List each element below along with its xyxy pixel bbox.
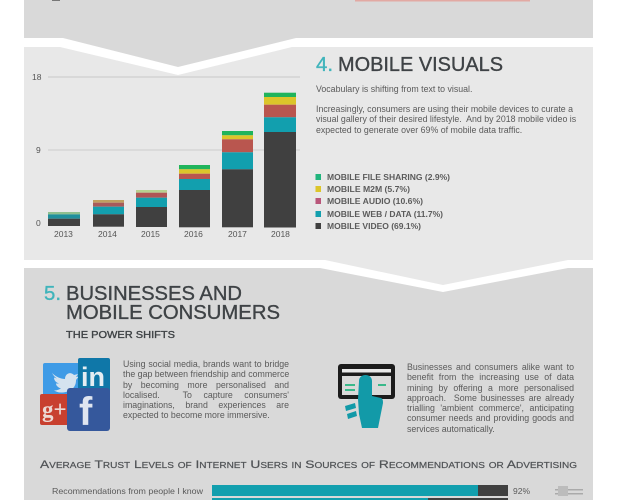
row: recommendations from people I know [52, 485, 583, 496]
heading: 5. businesses and mobile consumers [44, 283, 280, 341]
text block: section 4 body: expected to generate over 69% of mobile data traffic. [316, 125, 522, 135]
icon: twitter [43, 363, 80, 396]
bar 2015 [136, 190, 167, 227]
panel: previous section with chevron [24, 0, 593, 67]
bar 2016 [179, 165, 210, 227]
icon: hand swiping card [338, 364, 395, 428]
icon: google plus: g+ [42, 397, 67, 422]
chart axis labels: 2016 [184, 229, 203, 239]
text block: ambient commerce: consumer needs and providing goods and [407, 413, 574, 423]
icon: social media logos [40, 358, 110, 434]
heading: 5. businesses and mobile consumers: BUSINESSES AND [66, 283, 242, 305]
text block: ambient commerce: services automatically. [407, 424, 495, 434]
bar 2017 [222, 131, 253, 227]
chart axis labels: 2018 [271, 229, 290, 239]
panel: section 5 businesses background [24, 268, 593, 500]
text block: ambient commerce: Businesses and consumers alike want to [407, 362, 574, 372]
text block: section 4 intro: Vocabulary is shifting from text to visual. [316, 84, 472, 94]
bar chart: trust levels [52, 485, 583, 500]
heading: 5. businesses and mobile consumers: THE POWER SHIFTS [66, 330, 175, 341]
text block: ambient commerce: mining by offering a more personalised [407, 383, 574, 393]
chart axis labels: 2015 [141, 229, 160, 239]
text block: social media brands: Using social media, brands want to bridge [123, 359, 289, 369]
bar 2018 [264, 93, 296, 228]
text block: social media brands: by becoming more personalised and [123, 380, 289, 390]
chart axis labels: 2017 [228, 229, 247, 239]
text block: section 4 body: visual gallery of their desired lifestyle. And by 2018 mobile video is [316, 114, 576, 124]
text block: ambient commerce: approach. Some businesses are already [407, 393, 574, 403]
bar chart: mobile data traffic [32, 72, 300, 239]
row: recommendations from people I know: 92% [513, 486, 530, 496]
chart axis labels: 9 [36, 145, 41, 155]
text block: social media brands: localised. To capture consumers' [123, 390, 289, 400]
legend: mobile data types: MOBILE M2M (5.7%) [327, 185, 410, 194]
bar 2013 [48, 212, 80, 226]
legend: mobile data types: MOBILE VIDEO (69.1%) [327, 222, 421, 231]
heading: 4. mobile visuals: 4. [316, 54, 333, 76]
legend: mobile data types: MOBILE WEB / DATA (11.7%) [327, 210, 443, 219]
text block: social media brands: imaginations, brand experiences are [123, 400, 289, 410]
text block: ambient commerce: benefit from the increasing use of data [407, 372, 574, 382]
title: average trust levels: Average Trust Levels of Internet Users in Sources of Recommendations or Advertising [40, 459, 577, 471]
chart axis labels: 18 [32, 72, 42, 82]
heading: 5. businesses and mobile consumers: 5. [44, 283, 61, 305]
text block: social media brands: the gap between friendship and commerce [123, 369, 289, 379]
text block: social media brands [123, 359, 289, 420]
icon: facebook: f [79, 390, 93, 434]
legend: mobile data types [316, 173, 450, 231]
bar 2014 [93, 200, 124, 227]
chart axis labels: 2013 [54, 229, 73, 239]
heading: 4. mobile visuals: MOBILE VISUALS [338, 54, 503, 76]
icon: linkedin: in [81, 362, 105, 392]
legend: mobile data types: MOBILE AUDIO (10.6%) [327, 197, 423, 206]
text block: ambient commerce: trialling 'ambient commerce', anticipating [407, 403, 574, 413]
text block: social media brands: expected to become more immersive. [123, 410, 270, 420]
panel: section 4 mobile visuals background [24, 47, 593, 285]
text block: section 4 body [316, 104, 576, 135]
chart axis labels [32, 72, 290, 239]
chart axis labels: 0 [36, 218, 41, 228]
chart axis labels: 2014 [98, 229, 117, 239]
legend: mobile data types: MOBILE FILE SHARING (2.9%) [327, 173, 450, 182]
text block: ambient commerce [407, 362, 574, 434]
row: recommendations from people I know: Recommendations from people I know [52, 486, 204, 496]
heading: 5. businesses and mobile consumers: MOBILE CONSUMERS [66, 302, 280, 324]
text block: section 4 body: Increasingly, consumers are using their mobile devices to curate a [316, 104, 573, 114]
